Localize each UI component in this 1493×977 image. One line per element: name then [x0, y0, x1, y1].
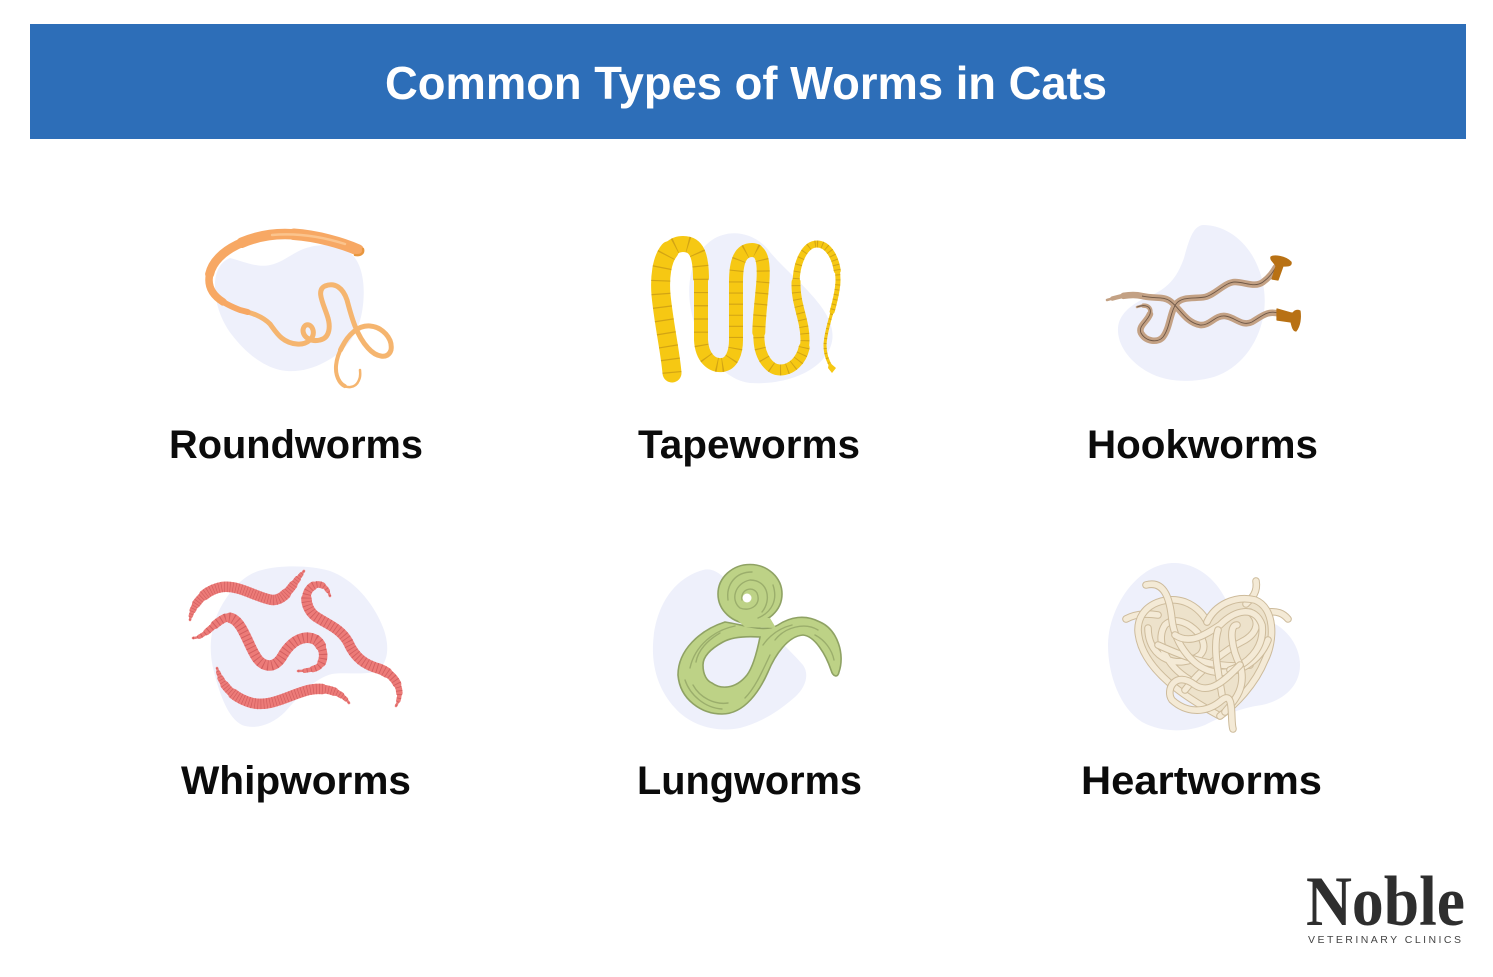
icon: heartworm: [1108, 563, 1300, 730]
label: lungworms: Lungworms: [637, 759, 862, 803]
label: tapeworms: Tapeworms: [638, 423, 860, 467]
icon: roundworm: [209, 234, 391, 387]
panel: lungworms: [637, 564, 862, 803]
panel: roundworms: [169, 234, 423, 467]
logo: Noble Veterinary Clinics: Noble: [1306, 863, 1465, 941]
label: hookworms: Hookworms: [1087, 423, 1318, 467]
logo: Noble Veterinary Clinics: VETERINARY CLINICS: [1308, 934, 1461, 946]
label: whipworms: Whipworms: [181, 759, 411, 803]
panel: whipworms: [181, 566, 411, 803]
icon: hookworm: [1107, 225, 1300, 381]
title: Common Types of Worms in Cats: [385, 57, 1107, 109]
panel: hookworms: [1087, 225, 1318, 467]
panel: heartworms: [1081, 563, 1322, 803]
label: heartworms: Heartworms: [1081, 759, 1322, 803]
icon: lungworm: [653, 564, 841, 729]
icon: whipworm: [190, 566, 399, 727]
panel: tapeworms: [638, 233, 860, 467]
title banner: [30, 24, 1466, 139]
icon: tapeworm: [661, 233, 838, 383]
label: roundworms: Roundworms: [169, 423, 423, 467]
